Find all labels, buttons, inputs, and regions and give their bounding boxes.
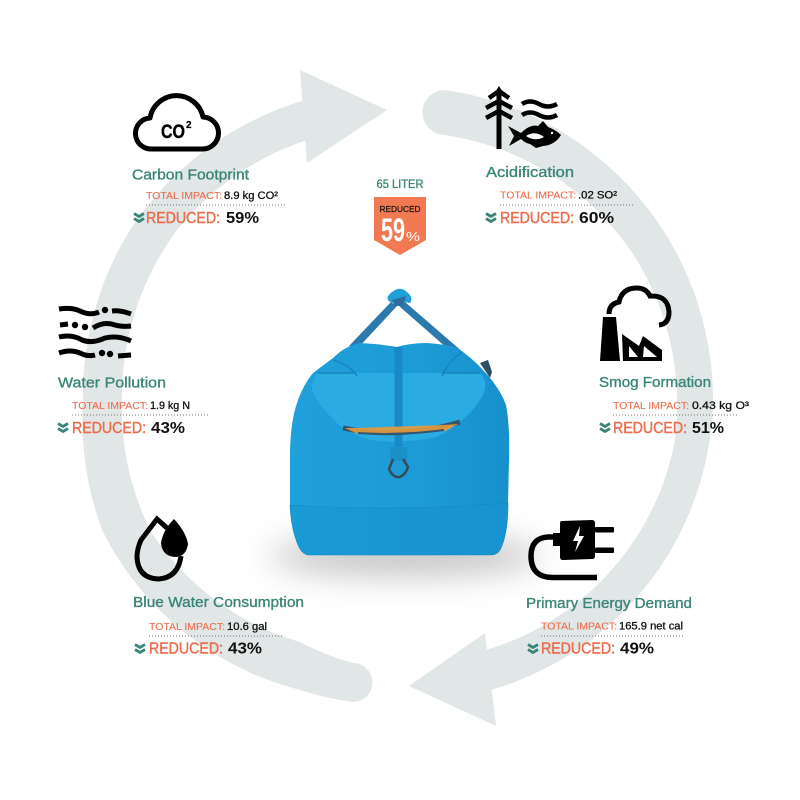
primary energy demand block: 49% [620, 640, 654, 658]
primary energy demand block: REDUCED: [541, 640, 615, 658]
icon: cloud: 2 [186, 120, 192, 131]
acidification block: 60% [579, 210, 614, 227]
reduced badge [374, 197, 426, 255]
reduced figure [58, 424, 68, 426]
smog formation block: 51% [692, 420, 724, 437]
icon: factory and smog [600, 288, 669, 361]
reduced badge: % [406, 229, 421, 244]
water pollution block: 1.9 kg N [150, 400, 190, 412]
reduced badge: REDUCED [380, 204, 420, 214]
total impact: TOTAL IMPACT: [541, 620, 617, 632]
blue water consumption block: REDUCED: [149, 640, 223, 658]
carbon footprint block: 59% [226, 210, 259, 227]
blue water consumption block [133, 519, 304, 658]
smog formation block: 0.43 kg O³ [692, 400, 749, 412]
duffel bag [290, 289, 509, 555]
bag base [290, 503, 508, 555]
heading: Blue Water Consumption [133, 594, 304, 611]
total impact: TOTAL IMPACT: [613, 400, 689, 412]
water pollution block: 43% [151, 420, 185, 437]
acidification block [486, 86, 635, 227]
heading: Primary Energy Demand [526, 595, 692, 612]
blue water consumption block: 10.6 gal [227, 621, 267, 633]
buckle [480, 360, 492, 378]
d-ring [389, 447, 408, 477]
icon: electric plug [531, 520, 614, 578]
circular arrow: left arc [82, 70, 387, 702]
orange zipper [343, 422, 460, 434]
reduced figure [600, 424, 610, 426]
icon: water drops [137, 519, 188, 579]
carbon footprint block [132, 96, 285, 227]
water pollution block: REDUCED: [72, 420, 146, 437]
heading: Smog Formation [599, 374, 711, 391]
total impact: TOTAL IMPACT: [72, 400, 148, 412]
heading: Acidification [486, 164, 574, 181]
primary energy demand block: 165.9 net cal [619, 620, 683, 632]
acidification block: REDUCED: [500, 210, 574, 227]
icon: polluted water [59, 307, 131, 357]
centre zip [394, 347, 402, 449]
reduced figure [528, 644, 538, 648]
carbon footprint block: 8.9 kg CO² [224, 190, 278, 202]
reduced badge: 59 [381, 212, 405, 248]
reduced figure [134, 214, 144, 216]
smog formation block [599, 288, 749, 437]
water pollution block [58, 307, 210, 437]
icon: tree, waves, fish [486, 86, 561, 149]
total impact: TOTAL IMPACT: [146, 190, 222, 202]
strap seams [318, 352, 480, 376]
carbon footprint block: REDUCED: [146, 210, 220, 227]
reduced figure [135, 644, 145, 648]
65 liter label: 65 LITER [376, 179, 424, 191]
heading: Carbon Footprint [132, 166, 250, 184]
blue water consumption block: 43% [228, 640, 262, 658]
top pocket [312, 373, 485, 441]
icon: cloud: CO [161, 122, 185, 143]
acidification block: .02 SO² [578, 190, 617, 202]
heading: Water Pollution [58, 374, 166, 392]
bag body [290, 343, 509, 555]
icon: cloud [135, 96, 218, 149]
reduced figure [486, 214, 496, 216]
smog formation block: REDUCED: [613, 420, 687, 437]
handle straps [349, 289, 472, 363]
primary energy demand block [526, 520, 692, 658]
circular arrow: right arc [409, 90, 713, 726]
total impact: TOTAL IMPACT: [149, 621, 225, 633]
bag shadow [270, 536, 540, 576]
total impact: TOTAL IMPACT: [500, 190, 576, 202]
